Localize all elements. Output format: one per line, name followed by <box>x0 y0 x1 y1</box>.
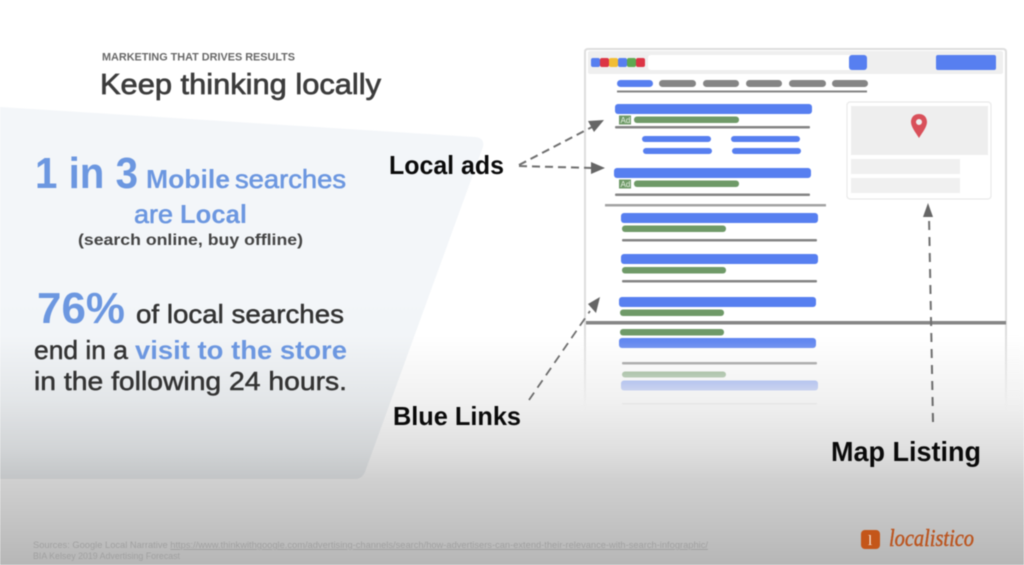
bottom gray gradient <box>0 335 1024 565</box>
sources footnote <box>33 540 709 561</box>
organic result 1 <box>621 213 818 242</box>
panel: statistics background <box>0 107 483 479</box>
stat: 1 in 3 mobile searches are local <box>35 149 346 249</box>
label: map listing: Map Listing <box>831 436 981 467</box>
icon: map pin <box>911 114 927 138</box>
logo mark letter: l <box>868 533 872 549</box>
text: of local searches: of local searches <box>136 299 344 329</box>
text: visit to the store: visit to the store <box>135 335 347 365</box>
browser top bar <box>588 51 1003 74</box>
ad sitelinks <box>642 136 801 154</box>
source line 1: Sources: Google Local Narrative https://www.thinkwithgoogle.com/advertising-channels/search/how-advertisers-can-extend-their-relevance-with-search-infographic/ <box>33 540 709 550</box>
ad result 1: Ad <box>620 116 630 125</box>
organic result 3 <box>619 297 816 316</box>
arrow: local ads to second ad <box>519 162 605 174</box>
text: are: are <box>134 199 173 229</box>
text: end in a: end in a <box>34 335 129 365</box>
browser frame <box>585 49 1006 420</box>
big number: 76%: 76% <box>37 284 125 333</box>
big number: 1 in 3: 1 in 3 <box>35 149 138 198</box>
organic result 2 <box>621 254 818 282</box>
text: Mobile: Mobile <box>146 164 230 194</box>
text: search online, buy offline: (search online, buy offline) <box>78 232 303 249</box>
map listing card <box>847 102 991 199</box>
logo wordmark: localistico <box>889 526 974 552</box>
organic results below the fold <box>619 329 818 404</box>
text: Local: Local <box>180 199 247 229</box>
search engine logo blocks <box>591 58 645 67</box>
stat: 76 percent visit the store <box>34 284 347 396</box>
arrow: blue links <box>529 297 600 400</box>
text: in the following 24 hours: in the following 24 hours. <box>34 366 347 396</box>
arrow: map listing <box>923 203 933 422</box>
navigation tabs <box>617 80 868 92</box>
label: local ads: Local ads <box>389 150 504 180</box>
title: Keep thinking locally <box>100 69 382 101</box>
ad result 2: Ad <box>620 180 630 189</box>
search results page mockup <box>585 49 1006 420</box>
logo mark <box>861 530 880 549</box>
ad result 2 <box>614 168 811 196</box>
arrow: local ads to first ad <box>519 120 604 165</box>
text: searches: searches <box>235 164 346 194</box>
logo: localistico <box>861 526 974 552</box>
label: blue links: Blue Links <box>393 401 521 431</box>
ad result 1 <box>615 104 812 128</box>
mockup fade <box>580 335 1020 410</box>
eyebrow heading: MARKETING THAT DRIVES RESULTS <box>102 52 295 64</box>
source line 2: BIA Kelsey 2019 Advertising Forecast <box>33 551 180 561</box>
fold line <box>586 321 1006 324</box>
mockup fade base <box>580 410 1020 422</box>
section divider <box>605 204 826 206</box>
